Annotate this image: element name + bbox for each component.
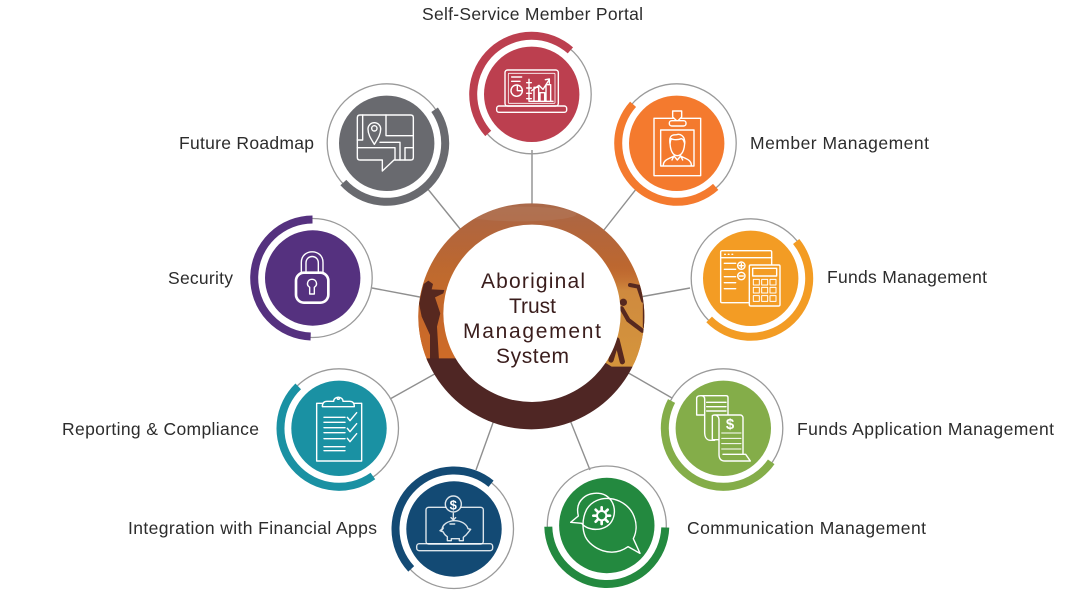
- connector lines: [372, 150, 690, 470]
- label: Reporting & Compliance: Reporting & Compliance: [62, 419, 259, 439]
- node: Security: [252, 217, 373, 339]
- icon: clipboard checklist: [317, 397, 362, 461]
- label: Security: Security: [168, 268, 233, 288]
- label: Self-Service Member Portal: Self-Service Member Portal: [422, 4, 643, 24]
- silhouette: left figure: [419, 281, 444, 360]
- node: Funds Management: [668, 196, 833, 361]
- central title: System: [496, 345, 569, 368]
- label: Funds Management: Funds Management: [827, 267, 987, 287]
- label: Communication Management: Communication Management: [687, 518, 926, 538]
- node: Self-Service Member Portal: [449, 12, 614, 177]
- icon: chat bubbles with gear: [571, 493, 640, 553]
- icon: window and calculator: [721, 251, 780, 306]
- label: Future Roadmap: Future Roadmap: [179, 133, 314, 153]
- central title: Management: [463, 320, 601, 343]
- label: Funds Application Management: Funds Application Management: [797, 419, 1054, 439]
- node: Funds Application Management: [642, 347, 805, 510]
- node: Communication Management: [546, 465, 667, 586]
- central title: Aboriginal: [481, 270, 585, 293]
- icon: dollar sign: $: [726, 416, 735, 433]
- node: Member Management: [594, 61, 759, 226]
- icon: laptop with piggy bank: [417, 496, 493, 551]
- label: Integration with Financial Apps: Integration with Financial Apps: [128, 518, 377, 538]
- node: Future Roadmap: [305, 62, 468, 225]
- icon: laptop with charts: [497, 70, 567, 112]
- node: Reporting & Compliance: [257, 347, 421, 510]
- icon: padlock: [296, 252, 328, 303]
- central title: [463, 270, 601, 368]
- central hub ring: [418, 203, 644, 430]
- icon: map with pin: [357, 115, 413, 171]
- central title: Trust: [509, 295, 556, 318]
- label: Member Management: Member Management: [750, 133, 929, 153]
- icon: receipts: [697, 396, 750, 461]
- silhouette: right figure: [611, 285, 644, 362]
- icon: dollar sign: $: [450, 498, 458, 512]
- node: Integration with Financial Apps: [371, 446, 537, 591]
- icon: ID badge: [654, 111, 701, 176]
